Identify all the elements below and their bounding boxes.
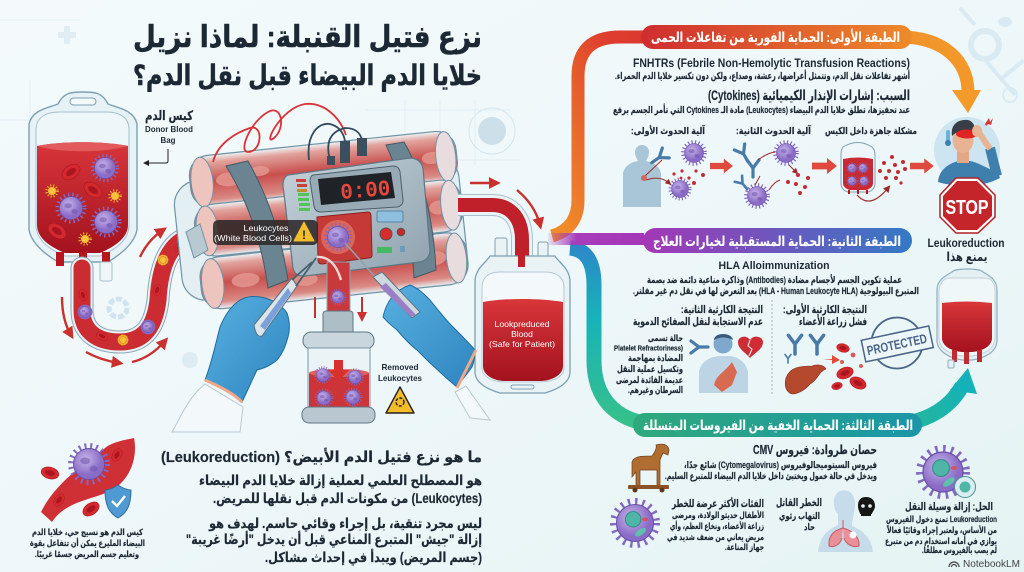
title: نزع فتيل القنبلة: لماذا نزيل — [133, 21, 482, 54]
contaminated bag icon — [841, 142, 907, 201]
CMV text: ويدخل في حالة خمول ويختبئ داخل خلايا الدم البيضاء للمتبرع السليم. — [665, 471, 877, 482]
arrow — [812, 158, 837, 174]
icon: stop sign — [940, 178, 995, 233]
icon: biohazard warning — [386, 387, 414, 413]
vessel caption: كيس الدم هو نسيج حي، خلايا الدم — [32, 527, 143, 538]
high risk groups text: مريض يعاني من ضعف شديد في — [667, 532, 764, 543]
title: خلايا الدم البيضاء قبل نقل الدم؟ — [133, 60, 482, 92]
vessel caption: وتعليم جسم المريض جسمًا غريبًا. — [35, 549, 139, 560]
clean blood bag — [937, 269, 997, 368]
second consequence heading: عدم الاستجابة لنقل الصفائح الدموية — [633, 316, 763, 328]
filtered blood bag: Blood — [511, 329, 533, 339]
NotebookLM logo: NotebookLM — [963, 559, 1020, 570]
layer 2 heading: الطبقة الثانية: الحماية المستقبلية لخيارات العلاج — [653, 233, 901, 250]
definition text block: إزالة "جيش" المتبرع المناعي قبل أن يدخل "أرضًا غريبة" — [186, 531, 482, 547]
leukocytes label: Leukocytes — [244, 223, 288, 233]
mechanism labels: آلية الحدوث الثانية: — [736, 124, 812, 137]
layer 3 flow arrow — [570, 248, 977, 425]
arrow — [910, 158, 934, 174]
vessel caption: البيضاء المليرع يمكن أن تتفاعل بقوة — [30, 537, 145, 549]
fatal risk text: الخطر القاتل — [776, 497, 822, 509]
layer 1 text: السبب: إشارات الإنذار الكيميائية (Cytokines) — [708, 87, 910, 104]
leukoreduction prevents this: يمنع هذا — [946, 250, 988, 264]
layer 3 heading: الطبقة الثالثة: الحماية الخفية من الفيروسات المتسللة — [643, 417, 913, 434]
title — [133, 21, 482, 92]
icon: trojan horse — [628, 444, 669, 492]
definition text block: ليس مجرد تنقية، بل إجراء وقائي حاسم. لهدف هو — [208, 516, 482, 531]
donor blood bag — [29, 92, 137, 281]
removed leukocytes label: Removed — [382, 362, 418, 372]
removal tube and collector — [302, 257, 375, 423]
icon: blood vessel with leukocyte and shield — [40, 438, 135, 522]
leukoreduction prevents this: Leukoreduction — [928, 238, 1004, 250]
filter bomb device — [170, 104, 470, 313]
layer 2 text: المتبرع البيولوجية (HLA - Human Leukocyte HLA) بعد التعرض لها في نقل دم غير مفلتر. — [633, 286, 919, 297]
platelet refractoriness text: عديمة الفائدة لمرضى — [616, 375, 683, 386]
CMV text: حصان طروادة: فيروس CMV — [753, 443, 877, 457]
timer — [310, 166, 403, 212]
layer 1 text — [613, 56, 910, 116]
blood level — [483, 299, 563, 381]
mechanism labels: مشكلة جاهزة داخل الكيس — [825, 126, 917, 137]
layer 2 text — [633, 260, 919, 297]
first consequence heading — [783, 303, 867, 328]
icon: patient with fever — [934, 117, 1000, 185]
icon: antibodies, liver and blood cells — [785, 335, 868, 394]
CMV text: فيروس السيتوميجالوفيروس (Cytomegalovirus) شائع جدًا، — [684, 460, 877, 471]
platelet refractoriness text: وتكسيل عملية النقل — [617, 364, 683, 375]
layer 1 text: عند تحفيزها، تطلق خلايا الدم البيضاء (Leukocytes) مادة الـ Cytokines التي تأمر الجسم برفع — [613, 103, 910, 116]
donor bag label: Bag — [160, 135, 176, 145]
right gloved hand with probe — [345, 243, 490, 420]
platelet refractoriness text: السرطان وغيرهم. — [628, 385, 683, 396]
high risk groups text — [667, 497, 764, 553]
mechanism 1 icon — [623, 143, 705, 207]
red window with virus — [317, 212, 372, 264]
layer 1 text: FNHTRs (Febrile Non-Hemolytic Transfusion Reactions) — [633, 56, 910, 70]
donor bag label: كيس الدم — [145, 108, 193, 124]
layer 1 flow arrow — [552, 37, 981, 236]
vessel caption — [30, 527, 145, 560]
donor bag label — [145, 108, 193, 145]
definition text block — [161, 448, 482, 565]
layer 2 text: عملية تكوين الجسم لأجسام مضادة (Antibodies) وذاكرة مناعية دائمة ضد بصمة — [647, 274, 902, 286]
high risk groups text: الفئات الأكثر عرضة للخطر — [671, 497, 764, 510]
icon: CMV virus — [921, 450, 976, 498]
timer: 0:00 — [339, 177, 391, 206]
arrow: label to bag — [146, 149, 168, 163]
divider — [771, 300, 773, 395]
mechanism labels — [631, 124, 917, 137]
flow arrows along tube — [62, 183, 540, 363]
wires — [213, 104, 346, 162]
CMV text — [665, 443, 877, 482]
mechanism labels: آلية الحدوث الأولى: — [631, 124, 706, 137]
first consequence heading: النتيجة الكارثية الأولى: — [783, 303, 867, 316]
filtered blood bag — [475, 238, 570, 393]
removed leukocytes label: Leukocytes — [378, 373, 422, 383]
input port — [186, 224, 208, 258]
tube from donor bag to filter — [78, 235, 200, 344]
definition text block: ما هو نزع فتيل الدم الأبيض؟ (Leukoreduction) — [161, 448, 482, 466]
filtered blood bag: Lookpreduced — [494, 319, 550, 329]
blood fill — [37, 142, 128, 253]
solution text — [885, 501, 997, 556]
platelet refractoriness text: المضادة بمهاجمة — [628, 353, 683, 364]
layer 1 heading: الطبقة الأولى: الحماية الفورية من تفاعلات الحمى — [651, 29, 900, 46]
layer 2 text: HLA Alloimmunization — [718, 260, 830, 272]
mechanism 2 icon — [734, 143, 810, 206]
platelet refractoriness text — [614, 333, 683, 396]
straps — [226, 161, 288, 288]
icon: lungs and skull — [818, 490, 875, 552]
definition text block: (جسم المريض) ويبدأ في إحداث مشاكل. — [265, 549, 482, 565]
icon: stop sign: STOP — [946, 197, 988, 219]
protected stamp: PROTECTED — [866, 331, 928, 358]
platelet refractoriness text: حالة تسمى — [648, 333, 683, 343]
solution text: Leukoreduction تمنع دخول الفيروس — [886, 514, 997, 525]
layer 2 connector — [548, 233, 644, 245]
high risk groups text: زراعة الأعضاء، ونخاع العظم، وأي — [670, 520, 764, 532]
platelet refractoriness text: (Platelet Refractoriness — [614, 346, 683, 352]
second consequence heading — [633, 304, 763, 328]
output tube — [458, 205, 522, 262]
fatal risk text — [776, 497, 822, 532]
protected stamp — [861, 318, 933, 368]
icon: patient and broken heart — [691, 334, 763, 393]
leukoreduction prevents this — [928, 238, 1004, 264]
donor bag label: Donor Blood — [145, 124, 193, 134]
layer 2 heading — [643, 228, 912, 253]
definition text block: هو المصطلح العلمي لعملية إزالة خلايا الدم البيضاء — [199, 473, 482, 489]
high risk groups text: جهاز المناعة. — [725, 542, 764, 553]
high risk groups text: الأطفال حديثو الولادة، ومرضى — [672, 510, 764, 521]
level LEDs — [296, 179, 310, 211]
control panel — [283, 158, 430, 276]
glass cylinders — [170, 129, 470, 313]
left gloved hand with tweezers — [172, 258, 316, 432]
leukocytes label: (White Blood Cells) — [214, 233, 292, 243]
definition text block: (Leukocytes) من مكونات الدم قبل نقلها للمريض. — [213, 491, 482, 507]
first consequence heading: فشل زراعة الأعضاء — [799, 315, 867, 328]
filtered blood bag: (Safe for Patient) — [489, 339, 555, 349]
buttons — [377, 211, 405, 253]
removed leukocytes label — [378, 362, 422, 383]
layer 1 heading — [641, 25, 912, 49]
icon: small virus — [615, 503, 655, 543]
leukocytes label — [213, 220, 318, 245]
fatal risk text: حاد — [804, 522, 815, 532]
icon: warning: ! — [302, 228, 306, 242]
second consequence heading: النتيجة الكارثية الثانية: — [681, 304, 763, 316]
arrow — [710, 159, 733, 173]
solution text: الحل: إزالة وسيلة النقل — [905, 501, 993, 513]
layer 3 heading — [633, 413, 922, 437]
fatal risk text: التهاب رئوي — [779, 511, 820, 522]
